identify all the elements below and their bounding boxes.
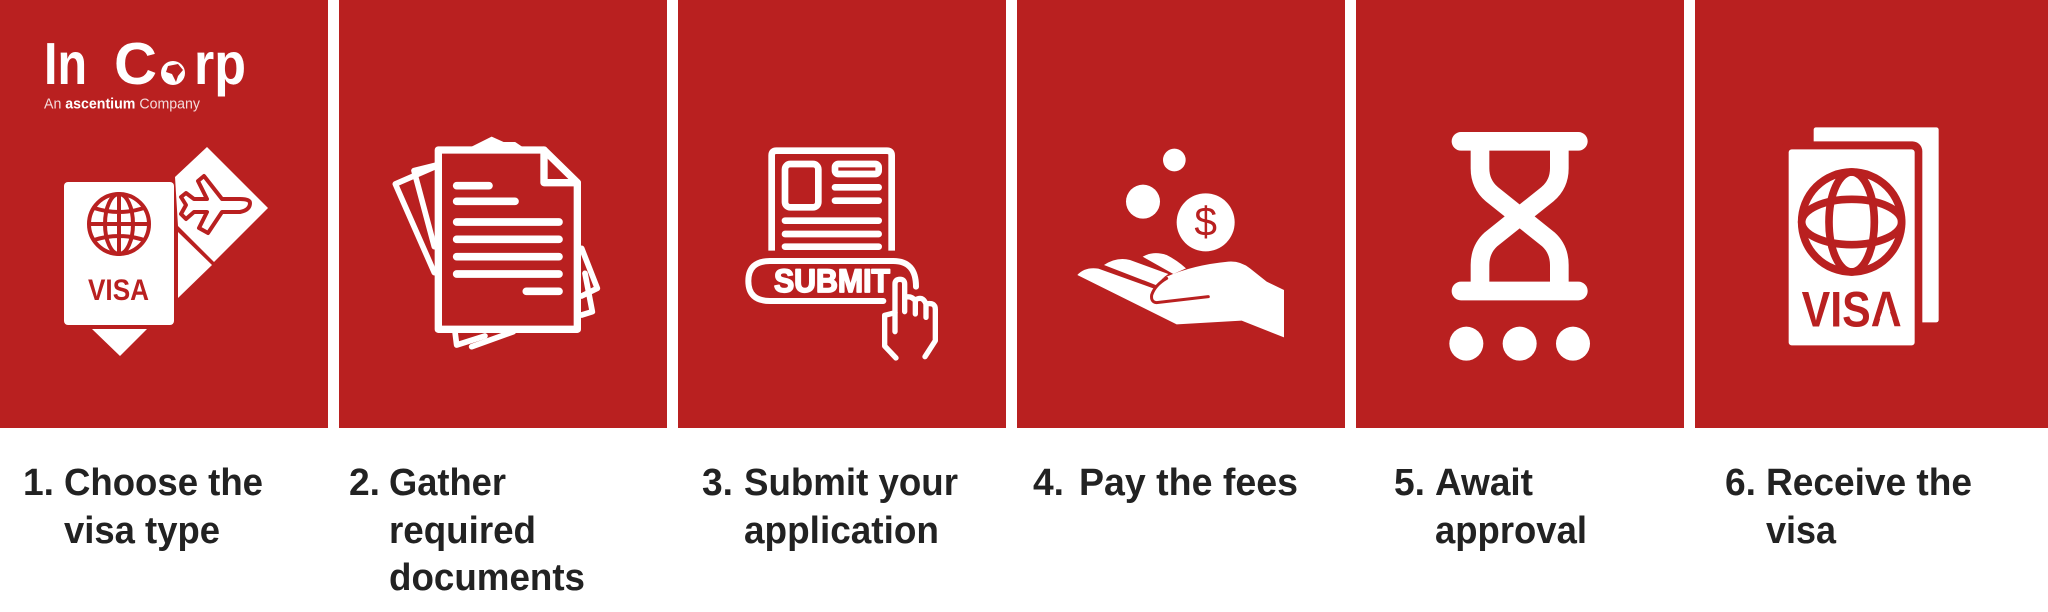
icon: visa document bbox=[1780, 127, 1939, 355]
step 2 label: Gather bbox=[389, 462, 506, 504]
icon: submit form with hand bbox=[748, 151, 935, 358]
panel 3: submit application bbox=[678, 0, 1006, 428]
step 2 label: 2. bbox=[349, 462, 380, 504]
step 6 label: Receive the bbox=[1766, 462, 1972, 504]
step 3 label: application bbox=[744, 510, 939, 552]
icon: visa document: VISA bbox=[1802, 281, 1902, 337]
step 6 label: 6. bbox=[1725, 462, 1756, 504]
step 3 label bbox=[702, 462, 958, 552]
icon: visa passport and ticket bbox=[64, 147, 268, 356]
icon: hand with coins bbox=[1077, 149, 1284, 337]
step 5 label bbox=[1394, 462, 1587, 552]
step 5 label: Await bbox=[1435, 462, 1533, 504]
step 3 label: 3. bbox=[702, 462, 733, 504]
logo: rp bbox=[194, 31, 246, 97]
icon: hand with coins: $ bbox=[1194, 198, 1217, 244]
panel 5: await approval bbox=[1356, 0, 1684, 428]
logo: An ascentium Company bbox=[44, 96, 201, 112]
logo: In bbox=[44, 31, 87, 97]
panel 1: choose the visa type bbox=[0, 0, 328, 428]
icon: stack of documents bbox=[395, 137, 597, 347]
step 4 label: 4. bbox=[1033, 462, 1064, 504]
step 6 label bbox=[1725, 462, 1972, 552]
step 1 label: Choose the bbox=[64, 462, 263, 504]
panel 4: pay the fees bbox=[1017, 0, 1345, 428]
step 3 label: Submit your bbox=[744, 462, 958, 504]
step 1 label: 1. bbox=[23, 462, 54, 504]
step 1 label: visa type bbox=[64, 510, 220, 552]
icon: hourglass with dots bbox=[1449, 141, 1590, 361]
icon: submit form with hand: SUBMIT bbox=[774, 263, 890, 299]
panel 6: receive the visa bbox=[1695, 0, 2048, 428]
step 1 label bbox=[23, 462, 263, 552]
step 2 label bbox=[349, 462, 585, 599]
panel 2: gather documents bbox=[339, 0, 667, 428]
step 2 label: documents bbox=[389, 557, 585, 599]
step 2 label: required bbox=[389, 510, 536, 552]
step 5 label: approval bbox=[1435, 510, 1587, 552]
icon: visa passport and ticket: VISA bbox=[88, 274, 149, 307]
step 6 label: visa bbox=[1766, 510, 1837, 552]
step 4 label: Pay the fees bbox=[1079, 462, 1298, 504]
logo bbox=[44, 31, 246, 112]
step 5 label: 5. bbox=[1394, 462, 1425, 504]
logo: C bbox=[114, 31, 157, 97]
